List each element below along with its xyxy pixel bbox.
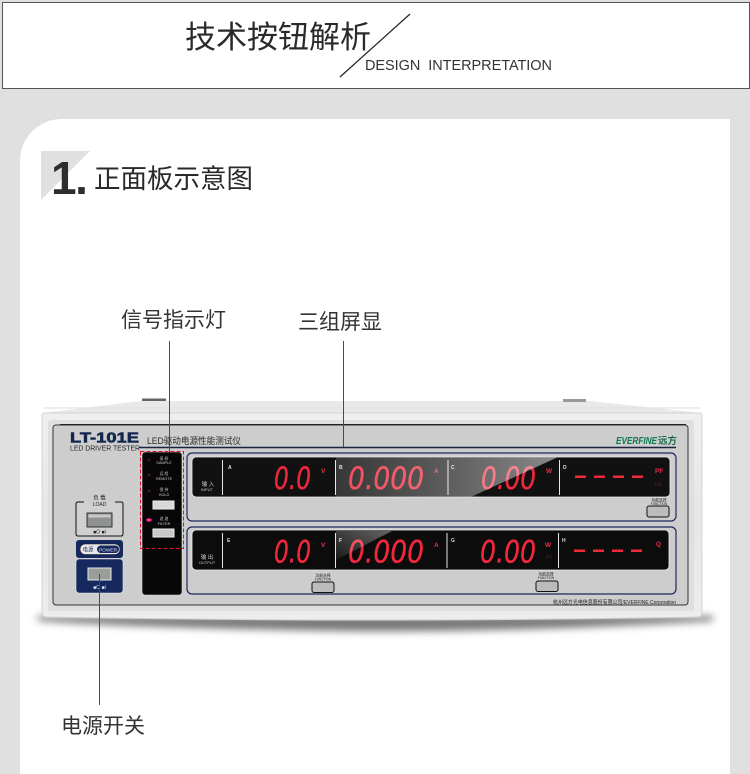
input display group: Hz bbox=[655, 482, 662, 488]
indicator strip: HOLD bbox=[159, 493, 170, 497]
output display group: V bbox=[321, 542, 326, 549]
company line: 杭州远方光电信息股份有限公司/EVERFINE Corporation bbox=[553, 598, 676, 606]
indicator strip: 远 程 bbox=[160, 471, 169, 476]
load switch bbox=[76, 494, 123, 536]
model name: LT-101E bbox=[70, 430, 139, 446]
input display group: 0.0 bbox=[274, 461, 311, 497]
input display group: V bbox=[321, 468, 326, 475]
input display group: A bbox=[434, 468, 439, 475]
output display group: E bbox=[227, 538, 231, 544]
input display group: INPUT bbox=[201, 487, 214, 492]
output display group: 输 出 bbox=[201, 553, 213, 561]
pointer: signal lights bbox=[169, 341, 170, 452]
indicator strip: 采 样 bbox=[160, 456, 169, 461]
indicator strip: REMOTE bbox=[156, 477, 173, 481]
input display group: 0.000 bbox=[348, 461, 424, 497]
output display group bbox=[187, 527, 676, 594]
power switch panel: ■O ■I bbox=[93, 585, 106, 591]
model name: LED驱动电源性能测试仪 bbox=[147, 435, 241, 446]
indicator strip: 滤 波 bbox=[160, 516, 169, 521]
input display group: 输 入 bbox=[202, 480, 215, 488]
output display group: 功能选择 bbox=[315, 573, 331, 578]
output display group: OUTPUT bbox=[199, 560, 216, 565]
output display group: 0.00 bbox=[480, 534, 536, 570]
model name: LED DRIVER TESTER bbox=[70, 444, 140, 452]
label: signal lights: 信号指示灯 bbox=[121, 309, 226, 332]
label: power switch: 电源开关 bbox=[61, 715, 145, 738]
header banner bbox=[2, 2, 750, 89]
load switch: 负 载 bbox=[93, 494, 106, 502]
banner subtitle with slash: DESIGN INTERPRETATION bbox=[365, 58, 552, 74]
device illustration bbox=[34, 398, 718, 637]
input display group: A bbox=[228, 465, 232, 471]
input display group: W bbox=[546, 468, 553, 475]
load switch: LOAD bbox=[93, 502, 107, 508]
input display group bbox=[187, 453, 676, 521]
input display group: PF bbox=[655, 468, 663, 475]
device shadow bbox=[36, 616, 714, 631]
output display group: 功能选择 bbox=[538, 572, 554, 576]
red highlight box bbox=[140, 452, 184, 548]
label: three displays: 三组屏显 bbox=[298, 311, 382, 334]
output display group: PF bbox=[546, 555, 552, 561]
input display group: FUNCTION bbox=[651, 502, 668, 506]
load switch: ■O ■I bbox=[93, 530, 106, 536]
input display group: C bbox=[451, 465, 455, 471]
banner title: 技术按钮解析 bbox=[185, 20, 371, 55]
input display group: 功能选择 bbox=[651, 498, 667, 502]
output display group: FUNCTION bbox=[315, 578, 332, 582]
power switch panel bbox=[76, 540, 123, 593]
banner subtitle with slash bbox=[340, 14, 552, 78]
indicator strip: FILTER bbox=[158, 522, 171, 526]
output display group: W bbox=[545, 542, 552, 549]
power switch panel: POWER bbox=[99, 547, 118, 553]
section title: 正面板示意图 bbox=[94, 164, 253, 194]
power switch panel: 电源 bbox=[82, 546, 94, 554]
indicator strip: 保 持 bbox=[160, 487, 169, 492]
output display group: A bbox=[434, 542, 439, 549]
indicator strip: SAMPLE bbox=[156, 461, 172, 465]
device body bbox=[42, 413, 702, 620]
input display group: D bbox=[563, 465, 567, 471]
output display group: H bbox=[562, 538, 566, 544]
output display group: 0.0 bbox=[274, 534, 311, 570]
pointer: displays bbox=[343, 341, 344, 447]
input display group: 0.00 bbox=[481, 461, 536, 497]
output display group: FUNCTION bbox=[538, 576, 555, 580]
brand logo: EVERFINE bbox=[616, 436, 657, 447]
section heading bbox=[41, 151, 253, 201]
model name bbox=[70, 430, 241, 452]
pointer: power switch bbox=[99, 574, 100, 705]
output display group: Q bbox=[656, 541, 661, 548]
output display group: 0.000 bbox=[348, 534, 424, 570]
indicator strip bbox=[142, 452, 182, 595]
device top surface bbox=[42, 398, 702, 413]
output display group: F bbox=[339, 538, 342, 544]
brand logo: 远方 bbox=[658, 435, 678, 447]
input display group: B bbox=[339, 465, 343, 471]
output display group: G bbox=[451, 538, 455, 544]
